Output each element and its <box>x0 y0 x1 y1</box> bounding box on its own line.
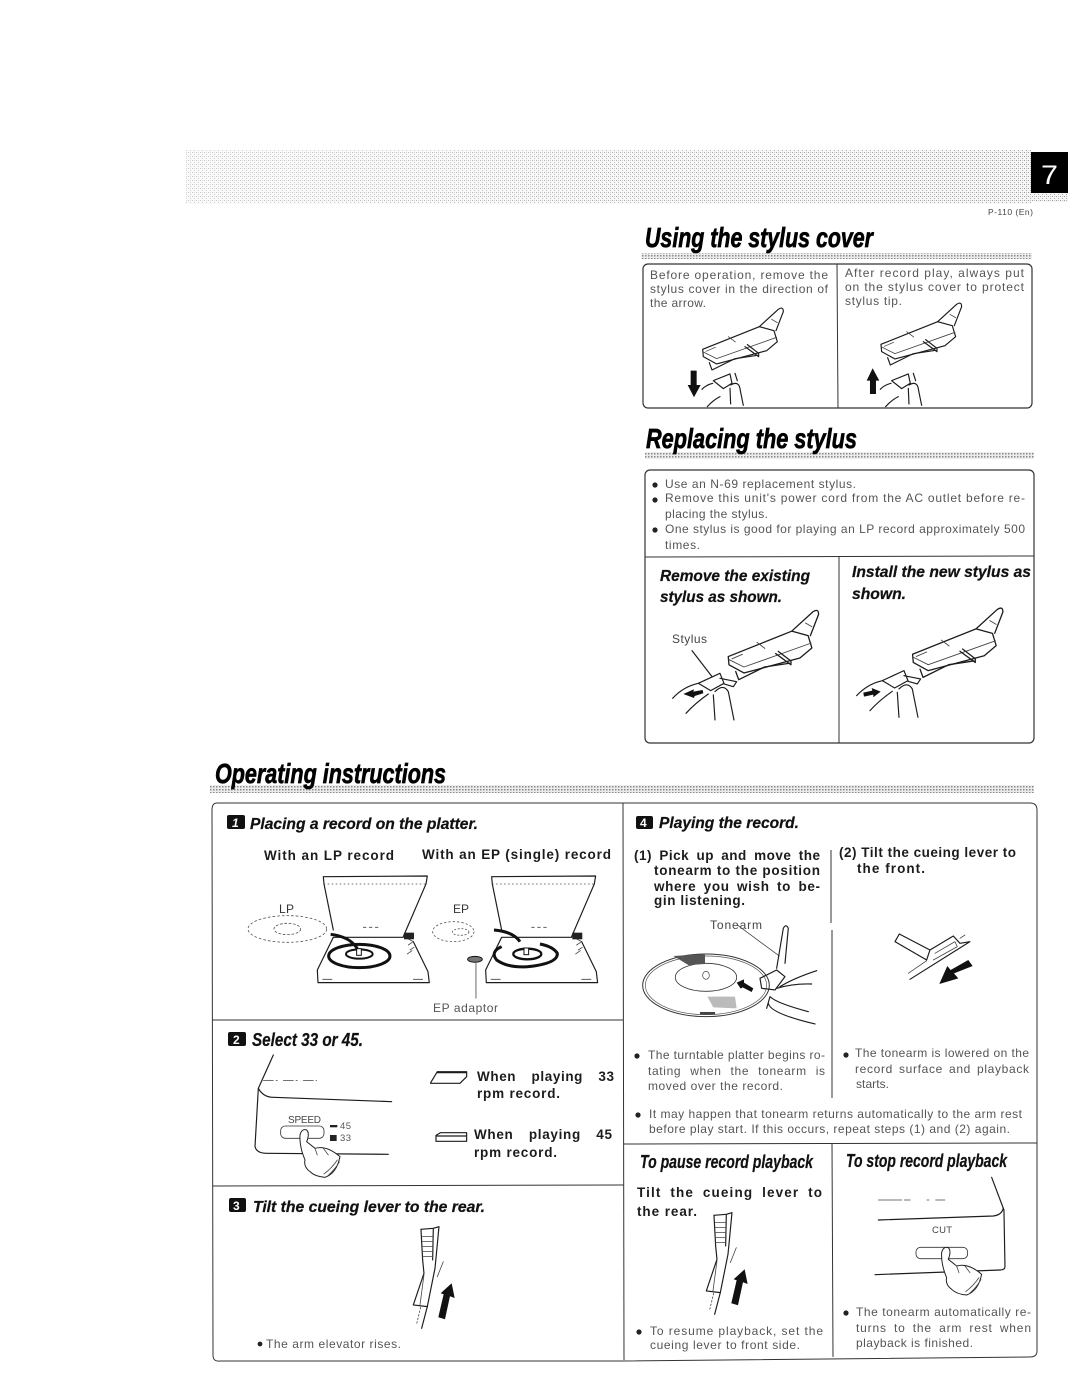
label: with an EP record: With an EP (single) record <box>422 847 611 862</box>
heading: using the stylus cover <box>641 222 1032 259</box>
note: tonearm may return: It may happen that tonearm returns automatically to the arm rest <box>649 1107 1023 1121</box>
step 3 heading: Tilt the cueing lever to the rear. <box>253 1199 485 1216</box>
text: when playing 33: rpm record. <box>477 1086 560 1101</box>
text: tilt to the rear: Tilt the cueing lever to <box>637 1185 822 1200</box>
text: tilt the cueing lever to the front: the front. <box>857 861 925 876</box>
text: pick up and move the tonearm: (1) Pick up and move the <box>634 848 820 863</box>
text: when playing 45: rpm record. <box>474 1145 557 1160</box>
icon: step 2: 2 <box>233 1033 240 1047</box>
note: tonearm lowered <box>843 1046 1030 1091</box>
step heading: remove the existing stylus: stylus as shown. <box>660 589 782 606</box>
illustration: removing the stylus cover <box>688 308 783 407</box>
step 4 heading: Playing the record. <box>659 815 799 832</box>
step 1 heading: Placing a record on the platter. <box>250 816 478 833</box>
text: before operation <box>650 268 829 310</box>
icon: step 1 <box>227 815 245 830</box>
text: when playing 33: When playing 33 <box>477 1069 614 1084</box>
illustration: cut button <box>875 1177 1005 1295</box>
illustration: fitting the stylus cover <box>867 303 962 407</box>
note: platter begins rotating <box>634 1048 825 1093</box>
text: pick up and move the tonearm <box>634 848 820 908</box>
note: tonearm lowered: record surface and playback <box>855 1062 1030 1076</box>
illustration: cueing lever <box>706 1213 748 1314</box>
pause heading: To pause record playback <box>640 1152 814 1172</box>
illustration: removing the stylus: Stylus <box>672 632 707 646</box>
step heading: remove the existing stylus <box>660 568 810 606</box>
icon: step 2 <box>228 1032 246 1047</box>
illustration: EP turntable with adaptor <box>433 876 598 1015</box>
panel: replacing the stylus <box>645 470 1034 743</box>
note: platter begins rotating: tating when the tonearm is <box>648 1064 825 1078</box>
note: arm elevator rises: The arm elevator rises. <box>266 1337 401 1351</box>
illustration: cut button: CUT <box>932 1225 952 1236</box>
text: when playing 45 <box>474 1127 612 1160</box>
header band: halftone strip <box>186 150 1068 204</box>
heading: replacing the stylus <box>645 423 1034 459</box>
text: after record play: After record play, always put <box>845 266 1025 280</box>
step 4: playing the record <box>634 815 1030 1136</box>
icon: pressed switch <box>436 1133 467 1141</box>
illustration: installing the stylus <box>857 608 1003 717</box>
note: tonearm automatically returns <box>843 1305 1031 1350</box>
text: when playing 33 <box>477 1069 614 1101</box>
note: tonearm lowered: The tonearm is lowered on the <box>855 1046 1029 1060</box>
illustration: LP turntable <box>248 876 429 983</box>
illustration: cueing lever with up arrow <box>413 1227 455 1328</box>
text: after record play: stylus tip. <box>845 294 902 308</box>
note: resume playback: To resume playback, set the <box>650 1324 823 1338</box>
illustration: speed button: 45 <box>340 1121 351 1132</box>
panel: using the stylus cover <box>643 264 1032 408</box>
step heading: install the new stylus: Install the new stylus as <box>852 564 1031 581</box>
text: pick up and move the tonearm: gin listening. <box>654 893 745 908</box>
note: tonearm automatically returns: playback is finished. <box>856 1336 973 1350</box>
text: pick up and move the tonearm: where you wish to be- <box>653 879 820 894</box>
heading: using the stylus cover: Using the stylus cover <box>645 222 875 253</box>
illustration: EP turntable with adaptor: EP adaptor <box>433 1001 498 1015</box>
icon: step 4 <box>636 816 653 830</box>
note: resume playback <box>636 1324 823 1352</box>
illustration: removing the stylus <box>672 610 819 720</box>
text: after record play: on the stylus cover to protect <box>845 280 1025 294</box>
illustration: speed button <box>255 1055 392 1177</box>
icon: step 3 <box>229 1198 246 1213</box>
text: before operation: the arrow. <box>650 296 706 310</box>
note: tonearm lowered: starts. <box>856 1077 889 1091</box>
icon: raised switch <box>431 1072 467 1083</box>
illustration: tonearm over record: Tonearm <box>710 918 762 932</box>
heading: operating instructions <box>210 758 1034 793</box>
text: tilt the cueing lever to the front: (2) Tilt the cueing lever to <box>839 845 1016 860</box>
text: pick up and move the tonearm: tonearm to the position <box>654 863 820 878</box>
text: tilt to the rear <box>637 1185 822 1219</box>
page number tab: 7 <box>1041 160 1058 190</box>
illustration: cueing lever to the front <box>895 934 973 984</box>
text: before operation: stylus cover in the direction of <box>650 282 829 296</box>
note: resume playback: cueing lever to front side. <box>650 1338 800 1352</box>
replacement notes: placing the stylus. <box>665 507 768 521</box>
text: before operation: Before operation, remove the <box>650 268 828 282</box>
illustration: EP turntable with adaptor: EP <box>453 902 469 916</box>
replacement notes: times. <box>665 538 700 552</box>
text: after record play <box>845 266 1025 308</box>
illustration: speed button: SPEED <box>288 1115 321 1126</box>
icon: step 4: 4 <box>640 816 647 830</box>
replacement notes: Use an N-69 replacement stylus. <box>665 477 856 491</box>
step 2: select 33 or 45 <box>228 1030 614 1177</box>
model code: P-110 (En) <box>988 207 1033 217</box>
illustration: tonearm over record <box>643 918 817 1024</box>
step heading: remove the existing stylus: Remove the existing <box>660 568 810 585</box>
step 2 heading: Select 33 or 45. <box>252 1030 363 1050</box>
page number tab <box>1031 152 1068 193</box>
section: pause record playback <box>636 1152 823 1352</box>
replacement notes: Remove this unit's power cord from the AC outlet before re- <box>665 491 1025 505</box>
replacement notes <box>652 477 1025 552</box>
text: when playing 45: When playing 45 <box>474 1127 612 1142</box>
text: tilt the cueing lever to the front <box>839 845 1016 876</box>
label: with an LP record: With an LP record <box>264 848 394 863</box>
note: tonearm may return: before play start. If this occurs, repeat steps (1) and (2) again. <box>649 1122 1010 1136</box>
step heading: install the new stylus <box>852 564 1031 603</box>
illustration: LP turntable: LP <box>279 902 294 916</box>
heading: replacing the stylus: Replacing the stylus <box>646 423 857 454</box>
note: platter begins rotating: moved over the record. <box>648 1079 783 1093</box>
note: tonearm automatically returns: The tonearm automatically re- <box>856 1305 1031 1319</box>
panel: operating instructions frame <box>212 803 1037 1361</box>
icon: step 3: 3 <box>233 1199 240 1213</box>
heading: operating instructions: Operating instructions <box>215 758 446 789</box>
stop heading: To stop record playback <box>846 1151 1008 1171</box>
text: tilt to the rear: the rear. <box>637 1204 697 1219</box>
section: stop record playback <box>843 1151 1031 1350</box>
step 3: tilt the cueing lever to the rear <box>229 1198 485 1351</box>
illustration: speed button: 33 <box>340 1133 351 1144</box>
note: tonearm automatically returns: turns to the arm rest when <box>856 1321 1031 1335</box>
step heading: install the new stylus: shown. <box>852 586 906 603</box>
note: platter begins rotating: The turntable platter begins ro- <box>648 1048 825 1062</box>
note: tonearm may return <box>635 1107 1023 1136</box>
step 1: placing a record <box>227 815 611 1015</box>
icon: step 1: 1 <box>232 816 239 830</box>
replacement notes: One stylus is good for playing an LP record approximately 500 <box>665 522 1025 536</box>
